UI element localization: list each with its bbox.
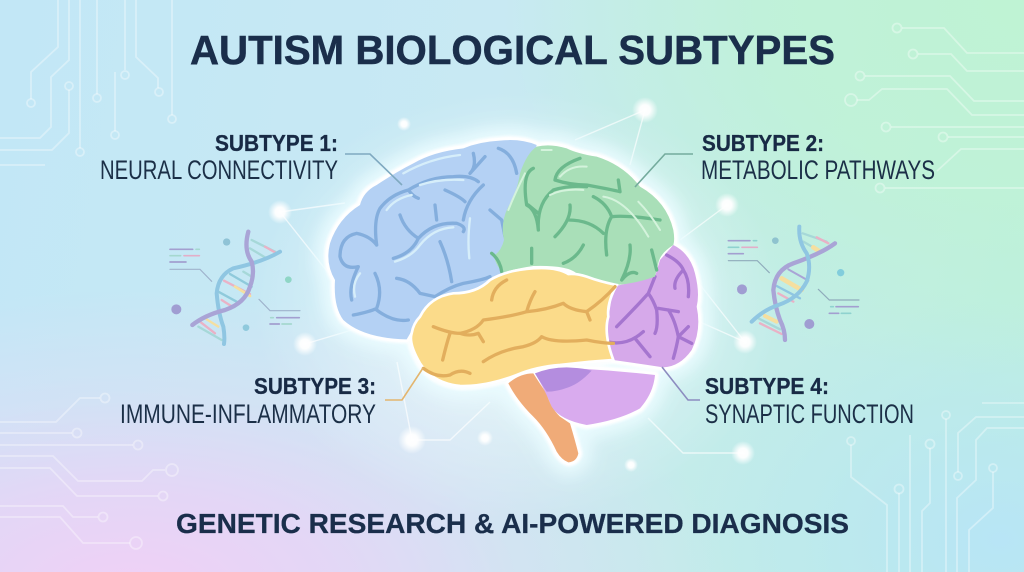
label: subtype 4 [662,367,914,429]
circuit traces: top-right [845,24,1024,192]
circuit traces: top-left [0,0,176,165]
circuit traces: bottom-right [847,403,1024,572]
icon: DNA helix right [728,227,859,340]
circuit traces: bottom-left [0,394,178,549]
label: subtype 2 [635,130,935,187]
icon: DNA helix left [170,232,300,344]
brain white outline [328,140,698,462]
brain glow outline [328,140,698,462]
label: subtype 3: IMMUNE-INFLAMMATORY [120,399,376,429]
label: subtype 3 [120,368,423,429]
footer heading: GENETIC RESEARCH & AI-POWERED DIAGNOSIS [176,508,849,539]
brain stem [508,373,578,462]
label: subtype 4: SUBTYPE 4: [705,373,829,399]
lobe: green [492,145,674,285]
label: subtype 2: METABOLIC PATHWAYS [701,155,935,185]
brain illustration [328,140,698,462]
lobe: yellow [411,268,617,386]
label: subtype 1: NEURAL CONNECTIVITY [100,155,338,185]
title: AUTISM BIOLOGICAL SUBTYPES [190,27,835,73]
label: subtype 4: SYNAPTIC FUNCTION [705,399,914,429]
label: subtype 3: SUBTYPE 3: [254,373,376,399]
lobe: purple [607,245,698,367]
label: subtype 1: SUBTYPE 1: [215,130,338,156]
brain wide halo [328,140,698,462]
label: subtype 1 [100,130,402,185]
label: subtype 2: SUBTYPE 2: [702,130,824,156]
cerebellum [535,367,655,425]
network lines and glowing nodes [268,97,757,472]
central glow behind brain [253,90,783,520]
lobe: blue [328,140,537,339]
